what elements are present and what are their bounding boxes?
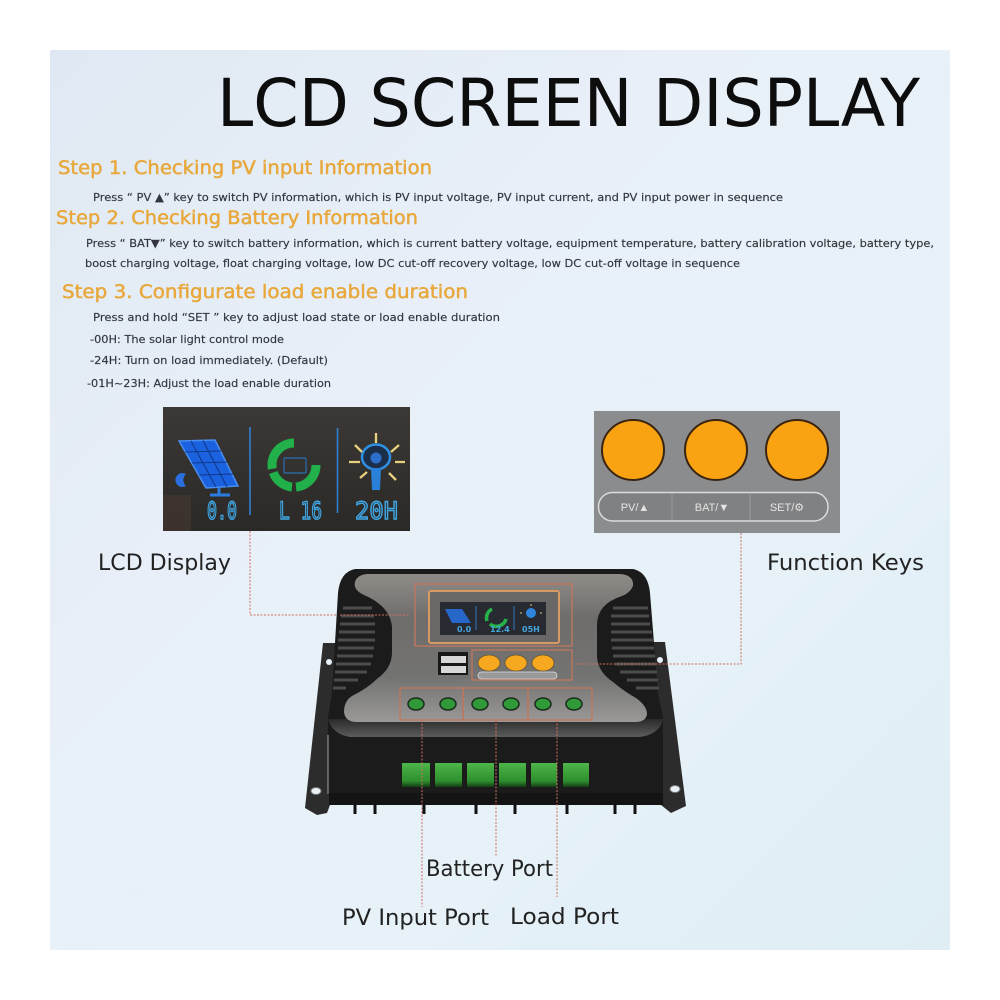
key labels: SET/⚙ [770, 502, 804, 514]
label: PV Input Port: PV Input Port [342, 906, 489, 931]
label: Load Port: Load Port [510, 905, 619, 930]
key labels [598, 492, 828, 521]
label: Battery Port: Battery Port [426, 857, 553, 882]
orange keys [602, 420, 828, 480]
orange highlight boxes [400, 584, 592, 720]
USB ports [438, 652, 468, 675]
LCD bezel [429, 591, 559, 643]
LCD readouts [207, 497, 398, 525]
key labels: BAT/▼ [695, 502, 729, 514]
LCD display enlarged panel [163, 407, 410, 531]
step 3 description: Press and hold “SET ” key to adjust load state or load enable duration [93, 311, 500, 324]
label: LCD Display: LCD Display [98, 551, 231, 576]
mini LCD screen [440, 602, 546, 635]
LCD readouts: L 16 [279, 497, 322, 525]
terminal feet [355, 803, 635, 814]
mini LCD screen: 05H [522, 625, 540, 634]
mini LCD screen: 12.4 [490, 625, 510, 634]
icon: battery ring [272, 443, 316, 487]
step 2 description: boost charging voltage, float charging voltage, low DC cut-off recovery voltage, low DC cut-off voltage in sequence [85, 257, 740, 270]
step 3 heading: Step 3. Configurate load enable duration [62, 281, 468, 303]
step 3 block [62, 281, 500, 390]
gray face plate [344, 574, 647, 722]
step 3 description: -24H: Turn on load immediately. (Default) [90, 354, 328, 367]
key labels: PV/▲ [621, 502, 649, 514]
connector lines [250, 531, 741, 907]
icon: solar panel [175, 440, 238, 495]
function keys enlarged panel [594, 411, 840, 533]
step 3 description: -00H: The solar light control mode [90, 333, 284, 346]
title: LCD SCREEN DISPLAY [217, 65, 921, 142]
controller body [328, 569, 663, 795]
step 2 description: Press “ BAT▼” key to switch battery information, which is current battery voltage, equipment temperature, battery calibration voltage, battery type, [86, 237, 934, 250]
step 1 heading: Step 1. Checking PV input Information [58, 157, 432, 179]
mini orange keys [478, 655, 554, 671]
label: Function Keys: Function Keys [767, 551, 924, 576]
solar charge controller device [305, 569, 686, 815]
step 2 heading: Step 2. Checking Battery Information [56, 207, 418, 229]
mounting plate [305, 642, 686, 815]
green indicator buttons [408, 698, 582, 710]
connector lines over device [340, 615, 680, 815]
step 1 description: Press “ PV ▲” key to switch PV information, which is PV input voltage, PV input current, and PV input power in sequence [93, 191, 783, 204]
LCD readouts: 20H [355, 497, 398, 525]
step 3 description [87, 311, 500, 390]
green terminals [402, 763, 589, 787]
step 1 block [58, 157, 783, 204]
step 2 block [56, 207, 934, 270]
bottom lip of rim [328, 719, 663, 737]
step 3 description: -01H~23H: Adjust the load enable duration [87, 377, 331, 390]
vent slots [333, 608, 659, 688]
mini LCD screen: 0.0 [457, 625, 472, 634]
LCD readouts: 0.0 [207, 497, 237, 525]
icon: light bulb [349, 433, 405, 490]
